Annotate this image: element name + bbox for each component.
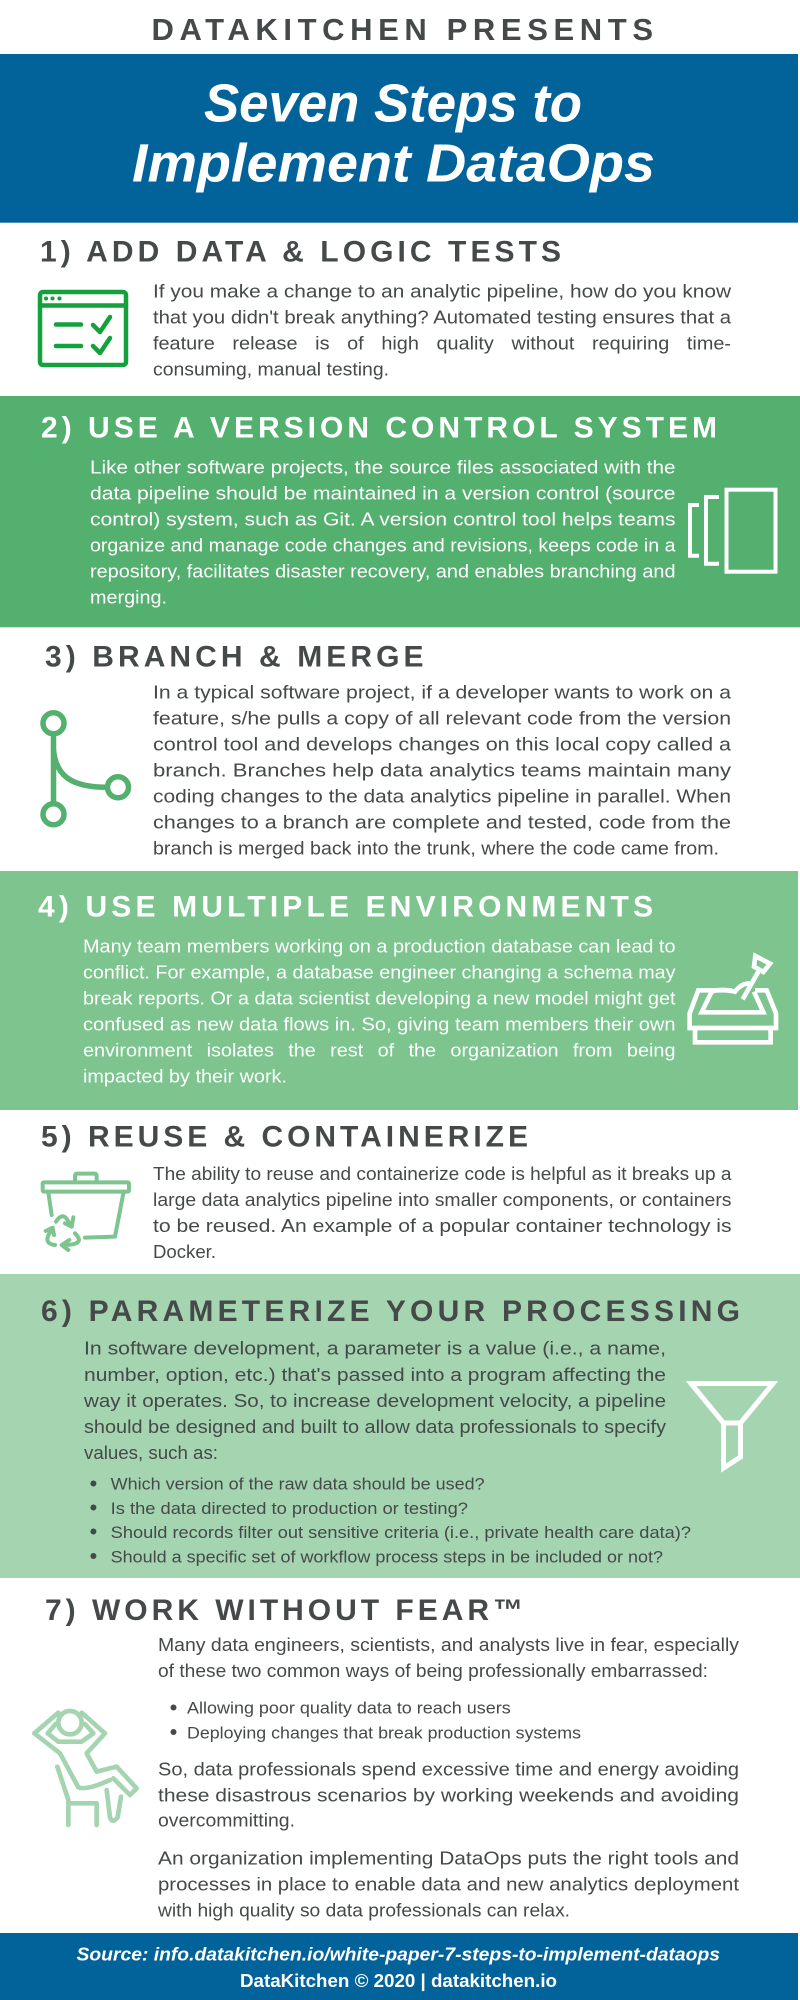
icon: test checklist window [40, 292, 126, 365]
text: step 1 body: feature release is of high quality without requiring time- [153, 333, 731, 353]
text: step 3 body: branch is merged back into the trunk, where the code came from. [153, 838, 719, 858]
text: step 4 body: break reports. Or a data scientist developing a new model might get [83, 988, 676, 1008]
list: embarrassment causes: Deploying changes that break production systems [187, 1724, 581, 1742]
icon: relaxed person in chair [34, 1711, 137, 1825]
text: step 1 body: If you make a change to an analytic pipeline, how do you know [153, 281, 732, 301]
text: step 6 body: number, option, etc.) that's passed into a program affecting the [84, 1365, 666, 1385]
icon: stacked versions [690, 490, 776, 572]
title: Implement DataOps [132, 134, 655, 194]
text: step 2 body: data pipeline should be maintained in a version control (source [90, 483, 676, 503]
title [132, 74, 655, 194]
text: step 7 closing paragraphs: An organization implementing DataOps puts the right tools and [158, 1848, 739, 1868]
text: step 6 body: values, such as: [84, 1443, 218, 1463]
heading: step 6: 6) PARAMETERIZE YOUR PROCESSING [41, 1295, 740, 1328]
text: step 7 intro [158, 1635, 739, 1681]
text: step 7 intro: Many data engineers, scientists, and analysts live in fear, especially [158, 1635, 739, 1655]
text: step 3 body: branch. Branches help data analytics teams maintain many [153, 760, 731, 780]
source line: Source: info.datakitchen.io/white-paper-7-steps-to-implement-dataops [76, 1944, 720, 1964]
text: step 3 body: control tool and develops changes on this local copy called a [153, 734, 732, 754]
text: step 3 body: In a typical software project, if a developer wants to work on a [153, 682, 732, 702]
panel: step 1 [40, 236, 732, 379]
text: step 2 body: control) system, such as Git. A version control tool helps teams [90, 509, 676, 529]
text: step 4 body: confused as new data flows in. So, giving team members their own [83, 1014, 676, 1034]
text: step 7 closing paragraphs [157, 1760, 739, 1921]
panel: step 6 [0, 1274, 800, 1578]
panel: step 5 [41, 1121, 733, 1262]
text: step 5 body: The ability to reuse and containerize code is helpful as it breaks up a [153, 1164, 733, 1184]
list: embarrassment causes: Allowing poor quality data to reach users [187, 1700, 511, 1718]
text: step 6 body [83, 1339, 666, 1463]
icon: branch and merge [43, 713, 128, 825]
list: parameter questions: Should records filter out sensitive criteria (i.e., private health care data)? [111, 1524, 691, 1542]
presenter heading: DATAKITCHEN PRESENTS [152, 12, 653, 47]
text: step 5 body: Docker. [153, 1242, 216, 1262]
list: parameter questions: Should a specific set of workflow process steps in be included or not? [111, 1548, 663, 1566]
title: Seven Steps to [204, 74, 582, 134]
text: step 7 closing paragraphs: overcommitting. [158, 1810, 295, 1830]
list: embarrassment causes [170, 1700, 581, 1742]
text: step 5 body: to be reused. An example of a popular container technology is [153, 1216, 732, 1236]
list: parameter questions: Is the data directed to production or testing? [111, 1500, 468, 1518]
text: step 7 closing paragraphs: these disastrous scenarios by working weekends and avoiding [158, 1786, 739, 1806]
text: step 7 closing paragraphs: processes in place to enable data and new analytics deployment [158, 1875, 739, 1895]
panel: step 4 [0, 871, 798, 1110]
text: step 6 body: should be designed and built to allow data professionals to specify [84, 1417, 666, 1437]
text: step 6 body: way it operates. So, to increase development velocity, a pipeline [83, 1391, 666, 1411]
panel: step 3 [43, 641, 732, 858]
text: step 4 body: impacted by their work. [83, 1066, 287, 1086]
list: parameter questions [90, 1476, 691, 1566]
text: step 7 intro: of these two common ways of being professionally embarrassed: [158, 1661, 708, 1681]
text: step 6 body: In software development, a parameter is a value (i.e., a name, [84, 1339, 666, 1359]
heading: step 3: 3) BRANCH & MERGE [45, 641, 424, 674]
text: step 4 body [83, 936, 676, 1086]
text: step 4 body: conflict. For example, a database engineer changing a schema may [83, 962, 676, 982]
text: step 1 body: that you didn't break anything? Automated testing ensures that a [153, 307, 732, 327]
text: step 2 body: merging. [90, 587, 167, 607]
text: step 2 body: Like other software projects, the source files associated with the [90, 457, 676, 477]
text: step 3 body: coding changes to the data analytics pipeline in parallel. When [153, 786, 731, 806]
icon: funnel [691, 1384, 773, 1468]
text: step 5 body [153, 1164, 733, 1262]
text: step 4 body: environment isolates the rest of the organization from being [83, 1040, 676, 1060]
icon: sandbox with shovel [690, 956, 776, 1042]
text: step 2 body: organize and manage code changes and revisions, keeps code in a [90, 535, 677, 555]
text: step 1 body: consuming, manual testing. [153, 359, 389, 379]
footer [0, 1933, 798, 2000]
heading: step 5: 5) REUSE & CONTAINERIZE [41, 1121, 528, 1154]
text: step 5 body: large data analytics pipeline into smaller components, or containers [153, 1190, 732, 1210]
text: step 2 body [90, 457, 677, 607]
icon: recycle bin container [43, 1174, 129, 1250]
copyright line: DataKitchen © 2020 | datakitchen.io [240, 1971, 557, 1991]
text: step 7 closing paragraphs: with high quality so data professionals can relax. [157, 1901, 570, 1921]
heading: step 4: 4) USE MULTIPLE ENVIRONMENTS [38, 891, 653, 924]
heading: step 1: 1) ADD DATA & LOGIC TESTS [40, 236, 561, 269]
panel: step 2 [0, 396, 800, 627]
text: step 3 body: changes to a branch are complete and tested, code from the [153, 812, 731, 832]
heading: step 7: 7) WORK WITHOUT FEAR™ [45, 1594, 523, 1627]
list: parameter questions: Which version of the raw data should be used? [111, 1476, 485, 1494]
text: step 3 body [153, 682, 732, 858]
text: step 4 body: Many team members working on a production database can lead to [83, 936, 676, 956]
text: step 2 body: repository, facilitates disaster recovery, and enables branching and [90, 561, 676, 581]
title banner [0, 54, 798, 223]
panel: step 7 [34, 1594, 739, 1921]
heading: step 2: 2) USE A VERSION CONTROL SYSTEM [41, 412, 717, 445]
text: step 7 closing paragraphs: So, data professionals spend excessive time and energy avoiding [158, 1760, 739, 1780]
text: step 3 body: feature, s/he pulls a copy of all relevant code from the version [153, 708, 731, 728]
text: step 1 body [153, 281, 732, 379]
